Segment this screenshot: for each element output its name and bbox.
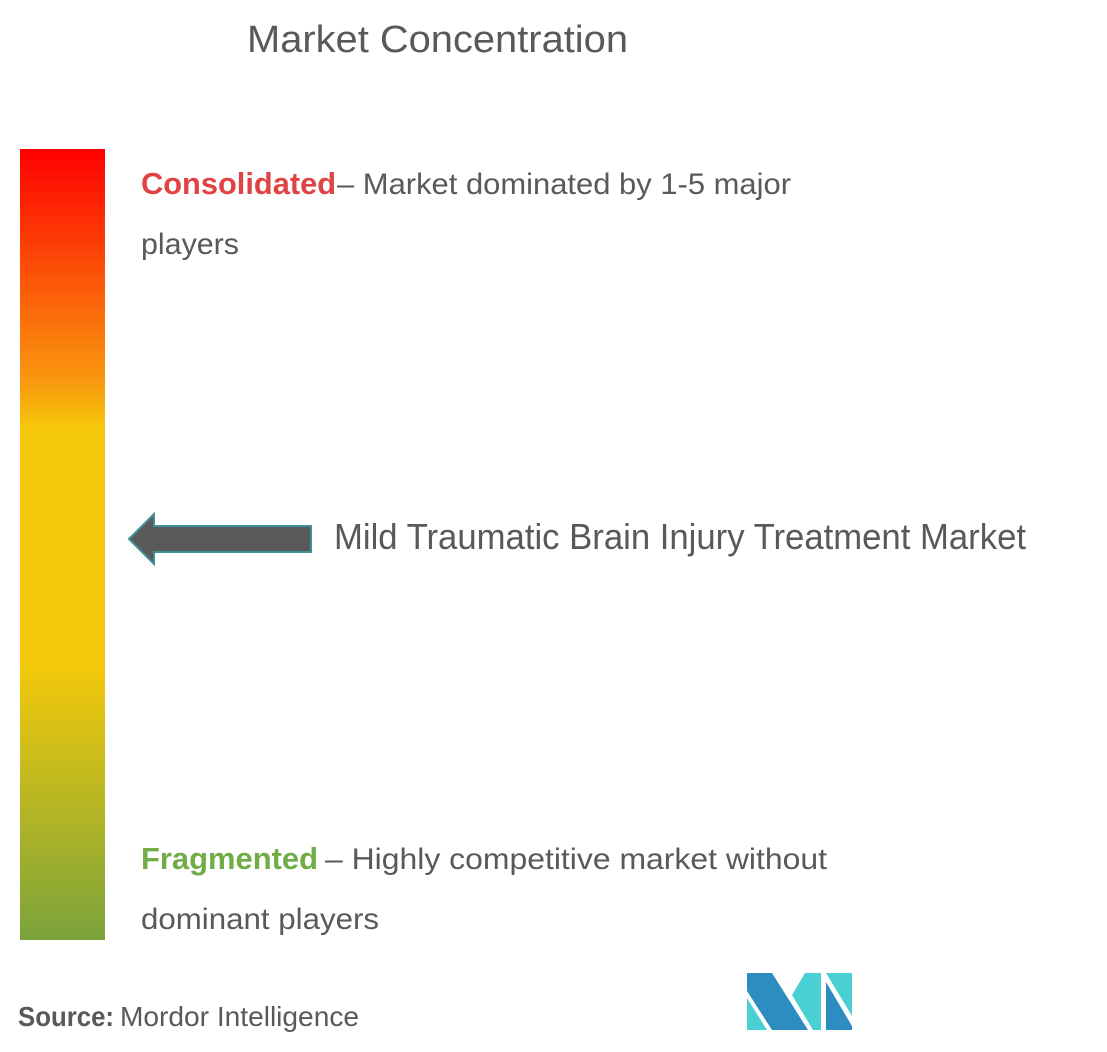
text block: fragmented: – Highly competitive market without: [325, 843, 828, 876]
title: Market Concentration: [247, 19, 628, 61]
text block: consolidated: players: [141, 228, 239, 261]
text block: fragmented: [141, 841, 828, 936]
text block: fragmented: Fragmented: [141, 841, 318, 876]
source line: Source:: [18, 1001, 114, 1032]
source line: [18, 1001, 359, 1032]
text block: fragmented: dominant players: [141, 903, 379, 936]
arrow: market position: [129, 514, 311, 564]
text block: consolidated: [141, 166, 791, 261]
market name label: Mild Traumatic Brain Injury Treatment Market: [334, 516, 1026, 557]
gradient scale bar: [20, 149, 105, 940]
icon: Mordor Intelligence logo: [747, 973, 852, 1030]
text block: consolidated: Consolidated: [141, 166, 336, 201]
source line: Mordor Intelligence: [120, 1001, 359, 1032]
text block: consolidated: – Market dominated by 1-5 major: [337, 168, 791, 201]
